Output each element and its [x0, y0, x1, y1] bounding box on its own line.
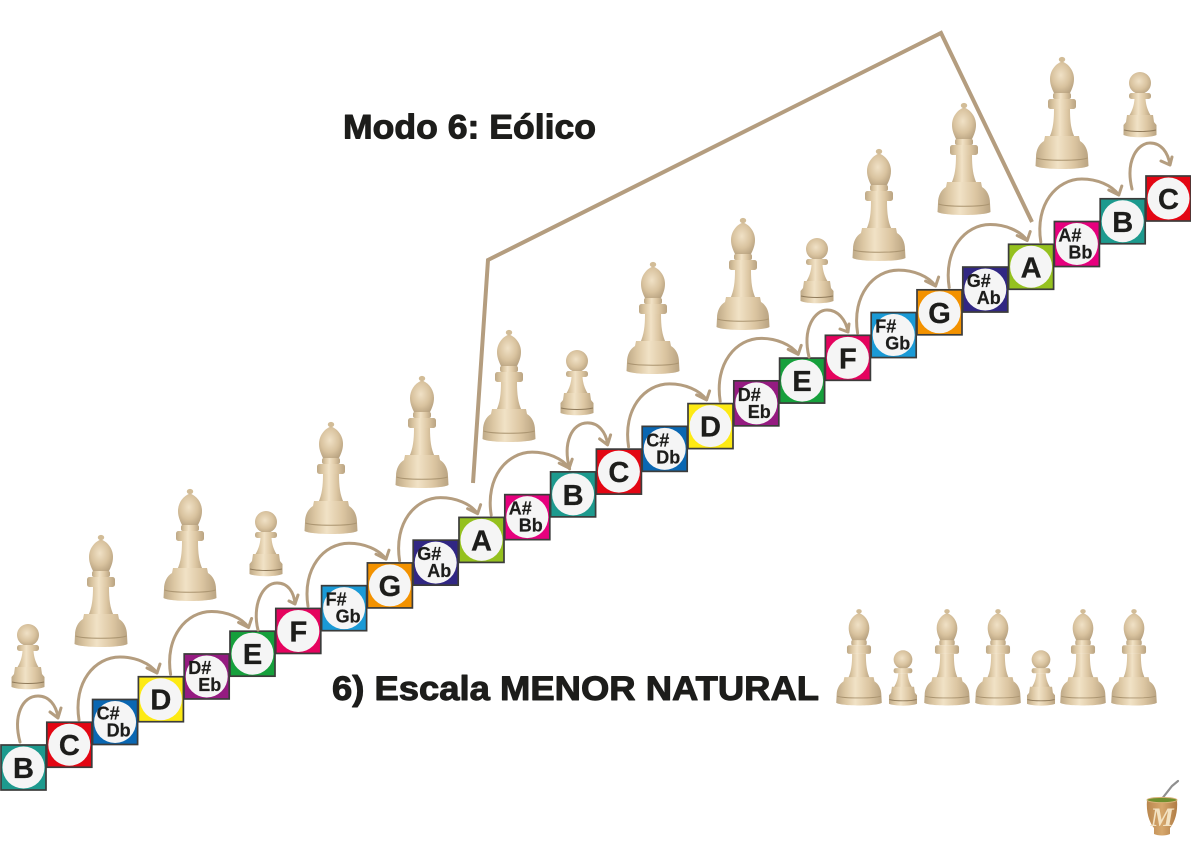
icon: bishop — [396, 376, 448, 488]
note D sharp / E flat: Eb — [198, 675, 221, 695]
note F sharp / G flat: F# — [326, 590, 347, 610]
note F sharp / G flat: F# — [875, 317, 896, 337]
note F sharp / G flat — [871, 313, 916, 358]
note B — [1, 745, 46, 790]
note D: D — [700, 412, 721, 444]
note A: A — [1021, 252, 1042, 284]
icon: bishop — [938, 103, 990, 215]
note E: E — [792, 366, 812, 398]
note B — [1100, 199, 1145, 244]
note D sharp / E flat: Eb — [748, 402, 771, 422]
note G sharp / A flat: G# — [967, 271, 991, 291]
note F sharp / G flat: Gb — [885, 334, 910, 354]
note D: D — [150, 685, 171, 717]
note A sharp / B flat — [1054, 222, 1099, 267]
note C: C — [1158, 184, 1179, 216]
note F sharp / G flat — [322, 586, 367, 631]
arrow: B to C semitone — [567, 423, 611, 469]
chess pieces above the staircase — [12, 57, 1156, 689]
note C sharp / D flat — [642, 426, 687, 471]
note D sharp / E flat — [734, 381, 779, 426]
note G sharp / A flat — [413, 540, 458, 585]
icon: pawn — [1027, 650, 1055, 706]
note G sharp / A flat — [963, 267, 1008, 312]
note G sharp / A flat: Ab — [977, 288, 1001, 308]
note C sharp / D flat: C# — [646, 430, 669, 450]
icon: bishop — [852, 149, 906, 261]
arrow: E to F semitone — [256, 583, 298, 630]
note G: G — [379, 571, 401, 603]
note F — [825, 335, 870, 380]
note E: E — [243, 639, 262, 671]
title: Modo 6: Eólico — [343, 108, 596, 146]
arrow: A to B — [490, 452, 572, 515]
icon: bishop — [836, 609, 882, 706]
arrow: D to E — [170, 611, 252, 674]
note E — [780, 358, 825, 403]
note G — [367, 563, 412, 608]
note F: F — [839, 343, 857, 375]
icon: mate cup logo — [1147, 781, 1178, 836]
scale name label: 6) Escala MENOR NATURAL — [332, 670, 819, 708]
note B — [551, 472, 596, 517]
icon: bishop — [74, 535, 128, 647]
note A — [1009, 244, 1054, 289]
icon: pawn — [800, 238, 834, 303]
note G sharp / A flat: Ab — [427, 561, 451, 581]
icon: pawn — [12, 624, 44, 689]
note C sharp / D flat — [93, 699, 138, 744]
icon: bishop — [1036, 57, 1088, 169]
note A sharp / B flat — [505, 495, 550, 540]
arrow: C to D — [628, 384, 710, 447]
arrow: F to G — [857, 270, 939, 333]
note A sharp / B flat: Bb — [519, 516, 543, 536]
note scale staircase — [1, 176, 1191, 790]
note G sharp / A flat: G# — [417, 544, 441, 564]
note A: A — [471, 525, 492, 557]
note G: G — [928, 298, 951, 330]
icon: pawn — [1124, 72, 1156, 137]
note C — [1146, 176, 1191, 221]
note C: C — [608, 457, 629, 489]
bracket line above central octave — [473, 33, 1032, 483]
legend row of chess pieces — [836, 609, 1157, 706]
note A sharp / B flat: A# — [1058, 226, 1081, 246]
arrow: F to G — [307, 543, 389, 606]
note D — [688, 404, 733, 449]
arrows between scale notes — [18, 143, 1172, 742]
note A — [459, 517, 504, 562]
note C: C — [59, 730, 80, 762]
note A sharp / B flat: A# — [509, 499, 532, 519]
note C sharp / D flat: Db — [656, 447, 680, 467]
note B: B — [563, 480, 584, 512]
arrow: C to D — [78, 657, 160, 720]
icon: bishop — [164, 489, 216, 601]
arrow: A to B — [1040, 179, 1122, 242]
icon: bishop — [1111, 609, 1157, 706]
arrow: B to C semitone — [1130, 143, 1172, 189]
note D sharp / E flat — [184, 654, 229, 699]
arrow: G to A — [948, 225, 1030, 288]
icon: bishop — [482, 330, 536, 442]
note D sharp / E flat: D# — [738, 385, 761, 405]
icon: bishop — [716, 218, 770, 330]
note C sharp / D flat: Db — [107, 720, 131, 740]
note B: B — [13, 753, 34, 785]
icon: bishop — [1060, 609, 1106, 706]
note C sharp / D flat: C# — [97, 703, 120, 723]
note E — [230, 631, 275, 676]
icon: bishop — [304, 422, 358, 534]
icon: pawn — [250, 511, 282, 576]
note C — [596, 449, 641, 494]
icon: mate cup logo: M — [1149, 803, 1174, 832]
icon: bishop — [626, 262, 680, 374]
arrow: D to E — [719, 338, 801, 401]
note F: F — [289, 616, 307, 648]
note A sharp / B flat: Bb — [1068, 243, 1092, 263]
icon: pawn — [889, 650, 917, 706]
icon: bishop — [924, 609, 970, 706]
arrow: E to F semitone — [807, 310, 849, 357]
icon: bishop — [975, 609, 1021, 706]
note F — [276, 608, 321, 653]
note D sharp / E flat: D# — [188, 658, 211, 678]
arrow: G to A — [399, 498, 481, 561]
note B: B — [1112, 207, 1133, 239]
arrow: B to C semitone — [18, 696, 61, 742]
note C — [47, 722, 92, 767]
note D — [138, 677, 183, 722]
note F sharp / G flat: Gb — [336, 607, 361, 627]
icon: pawn — [560, 350, 594, 415]
note G — [917, 290, 962, 335]
